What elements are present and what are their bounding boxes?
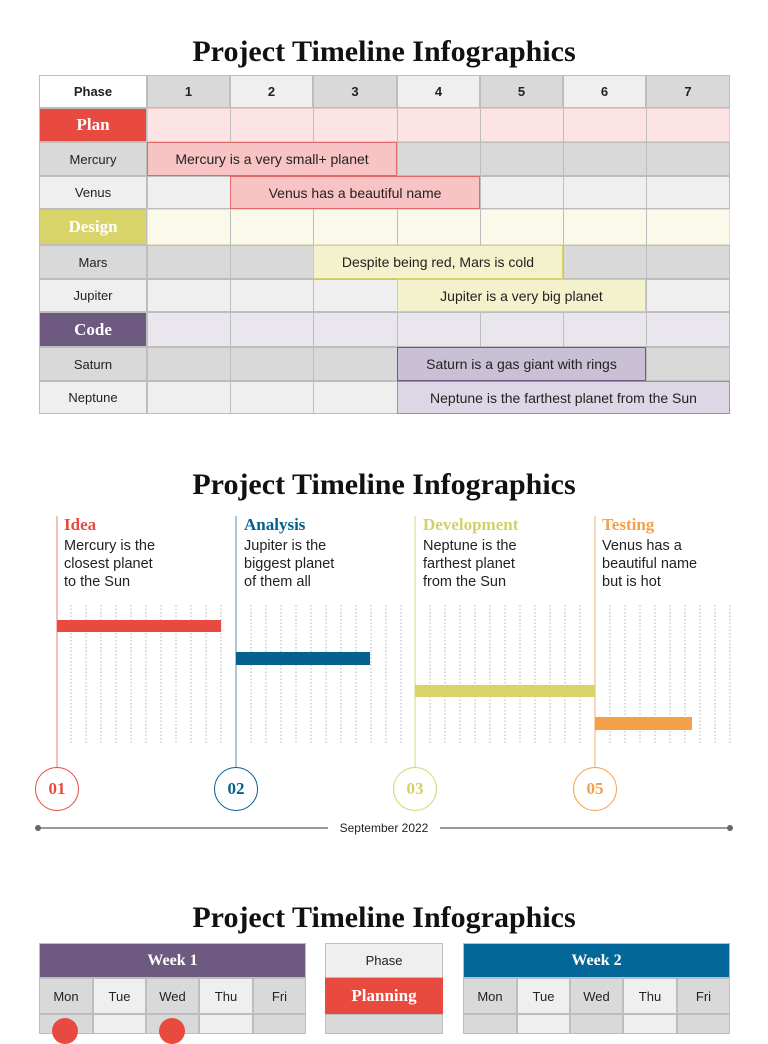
circle 01: 01	[48, 779, 66, 798]
phase: analysis: of them all	[244, 574, 311, 590]
title 2: Project Timeline Infographics	[192, 468, 576, 501]
panel: week 2: Week 2	[571, 952, 622, 968]
panel: week 1	[39, 943, 306, 1044]
bar: saturn: Saturn is a gas giant with rings	[426, 356, 617, 372]
phase: development: farthest planet	[423, 556, 515, 572]
title 3: Project Timeline Infographics	[192, 901, 576, 934]
circle 03	[393, 767, 437, 811]
bar: mercury	[147, 142, 397, 176]
circle 05	[573, 767, 617, 811]
row backgrounds: Saturn	[74, 356, 112, 372]
panel: phase	[325, 943, 443, 1034]
row backgrounds: Mercury	[70, 152, 116, 166]
phase: testing: Testing	[602, 515, 654, 534]
phase: idea: Idea	[64, 515, 96, 534]
row backgrounds: Neptune	[68, 390, 118, 405]
panel: gantt table	[39, 75, 730, 414]
panel: week 1: Week 1	[147, 952, 198, 968]
phase: idea	[64, 515, 155, 590]
phase: testing	[602, 515, 697, 590]
phase: development: Neptune is the	[423, 538, 517, 554]
phase: development: Development	[423, 515, 518, 534]
bar: mars: Despite being red, Mars is cold	[342, 254, 534, 270]
bar: mars	[313, 245, 563, 279]
phase: testing: Venus has a	[602, 538, 682, 554]
bar: neptune: Neptune is the farthest planet from the Sun	[430, 390, 697, 406]
row backgrounds: Plan	[76, 115, 110, 134]
bar: jupiter: Jupiter is a very big planet	[440, 288, 603, 304]
phase: analysis: Analysis	[244, 515, 305, 534]
panel: phase: Planning	[351, 986, 417, 1005]
panel: week 2: Thu	[639, 988, 661, 1004]
phase: development	[423, 515, 518, 590]
circle 03: 03	[406, 779, 424, 798]
row backgrounds: Venus	[75, 185, 111, 200]
phase: development: from the Sun	[423, 574, 506, 590]
chart: timeline gantt	[35, 515, 733, 835]
phase: idea: to the Sun	[64, 574, 130, 590]
phase: testing: but is hot	[602, 574, 661, 590]
header row: 5	[518, 84, 525, 99]
row backgrounds: Jupiter	[73, 288, 113, 303]
phase: analysis	[244, 515, 334, 590]
timeline label: September 2022	[340, 821, 428, 835]
header row: 1	[185, 84, 192, 99]
panel: phase: Phase	[366, 953, 402, 968]
circle 02: 02	[228, 779, 244, 798]
phase: idea: Mercury is the	[64, 538, 155, 554]
panel: week 2: Fri	[696, 988, 711, 1004]
panel: week 2	[463, 943, 730, 1034]
phase: analysis: Jupiter is the	[244, 538, 326, 554]
bar: mercury: Mercury is a very small+ planet	[175, 151, 369, 167]
panel: week 1: Wed	[159, 988, 186, 1004]
phase: analysis: biggest planet	[244, 556, 334, 572]
panel: week 1: Fri	[272, 988, 287, 1004]
panel: week 2: Tue	[533, 988, 554, 1004]
panel: week 1: Tue	[109, 988, 130, 1004]
row backgrounds: Design	[68, 217, 118, 236]
phase: testing: beautiful name	[602, 556, 697, 572]
panel: week 1: Mon	[53, 988, 79, 1004]
phase: idea: closest planet	[64, 556, 153, 572]
header row: Phase	[74, 84, 112, 99]
bar: jupiter	[397, 279, 646, 312]
panel: week 2: Wed	[583, 988, 610, 1004]
bar: saturn	[397, 347, 646, 381]
header row: 4	[435, 84, 442, 99]
panel: week 2: Mon	[477, 988, 503, 1004]
panel: week 1: Thu	[215, 988, 237, 1004]
bar: venus	[230, 176, 480, 209]
circle 02	[214, 767, 258, 811]
title 1: Project Timeline Infographics	[192, 35, 576, 68]
header row	[39, 75, 730, 108]
bar: venus: Venus has a beautiful name	[269, 184, 441, 200]
red dots	[52, 1018, 78, 1044]
circle 01	[35, 767, 79, 811]
header row: 6	[601, 84, 608, 99]
header row: 3	[351, 84, 359, 99]
header row: 7	[684, 84, 692, 99]
header row: 2	[268, 84, 275, 99]
bar: neptune	[397, 381, 730, 414]
row backgrounds: Mars	[79, 254, 107, 270]
row backgrounds	[39, 108, 730, 414]
row backgrounds: Code	[74, 320, 112, 338]
circle 05: 05	[586, 779, 604, 798]
